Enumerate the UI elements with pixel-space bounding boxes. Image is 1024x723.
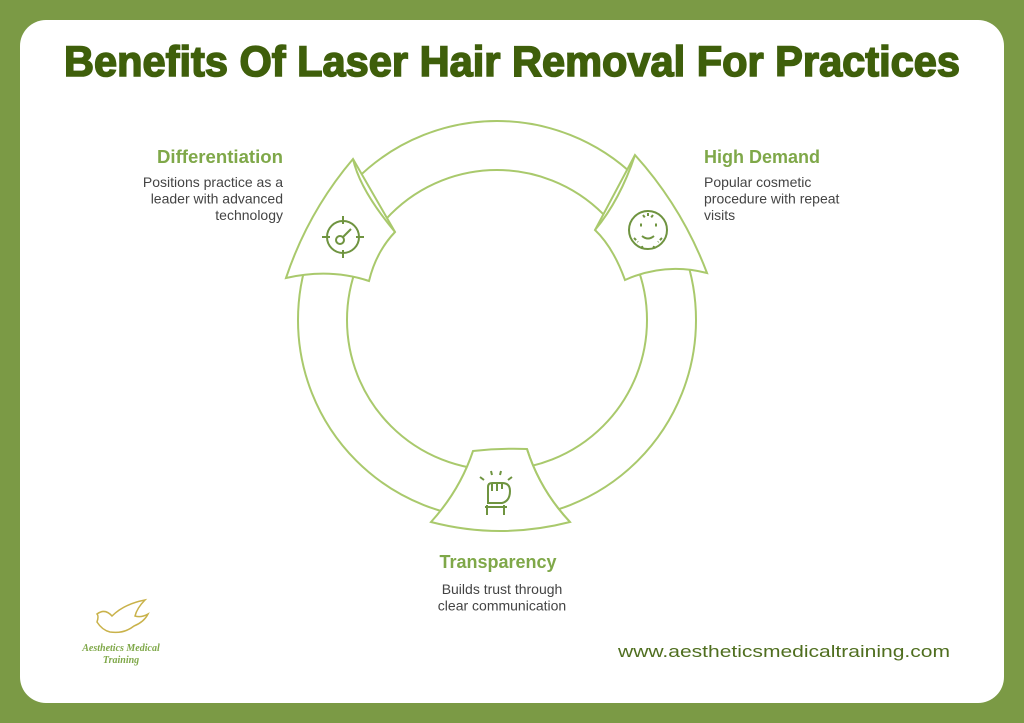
logo: Aesthetics Medical [81, 643, 160, 654]
arrow: transparency [431, 449, 570, 531]
heading: differentiation: Differentiation [157, 147, 283, 167]
arrow: high demand [595, 155, 707, 280]
icon: fist [480, 471, 512, 515]
text: differentiation: technology [215, 207, 283, 223]
heading: transparency: Transparency [439, 552, 557, 572]
logo: Training [103, 655, 139, 666]
heading: high demand: High Demand [704, 147, 820, 167]
icon: face [629, 211, 667, 250]
text: transparency: clear communication [438, 598, 566, 614]
title: Benefits Of Laser Hair Removal For Practices [64, 38, 960, 86]
text: high demand: visits [704, 207, 735, 223]
text: differentiation: leader with advanced [151, 190, 283, 206]
text: high demand: procedure with repeat [704, 190, 840, 206]
text: differentiation: Positions practice as a [143, 174, 283, 190]
text: high demand: Popular cosmetic [704, 174, 811, 190]
website url: www.aestheticsmedicaltraining.com [617, 642, 950, 661]
arrow: differentiation [286, 159, 395, 281]
chart: cycle ring [286, 121, 707, 531]
text: transparency: Builds trust through [442, 581, 562, 597]
logo [81, 600, 160, 666]
icon: target gauge [322, 216, 364, 258]
